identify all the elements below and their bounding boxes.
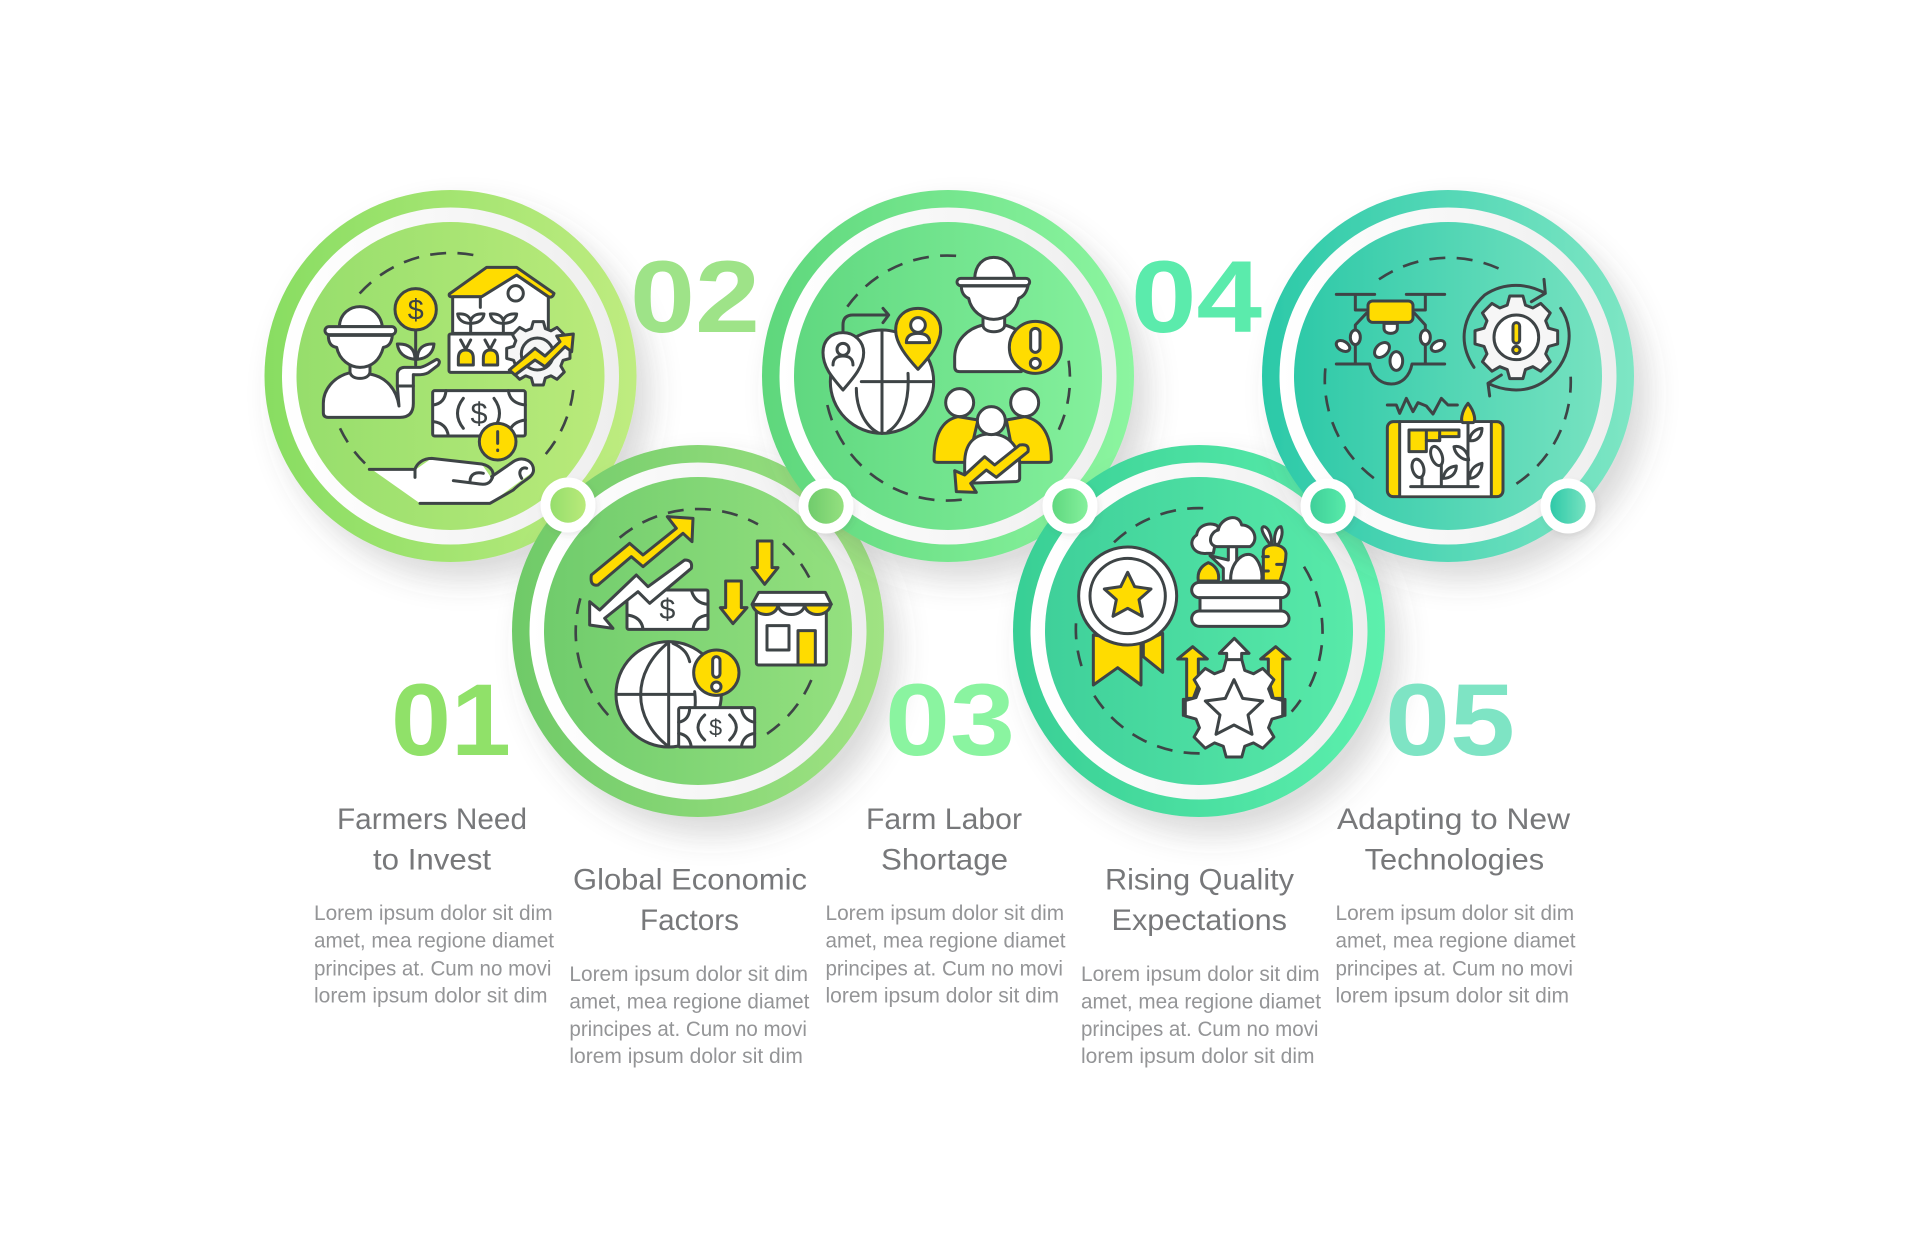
heading: Adapting to New <box>1337 803 1570 836</box>
text block: global economic factors <box>569 863 810 1068</box>
connector dot 1 <box>540 478 596 532</box>
icon: arrows, money, store and globe <box>576 509 831 747</box>
heading: Global Economic <box>573 863 807 896</box>
body text: principes at. Cum no movi <box>1081 1018 1318 1041</box>
body text: Lorem ipsum dolor sit dim <box>1081 963 1320 986</box>
panel: circle 1 farmers need to invest <box>264 190 636 562</box>
text block: farm labor shortage <box>826 803 1066 1008</box>
body text: lorem ipsum dolor sit dim <box>1336 985 1569 1008</box>
body text: amet, mea regione diamet <box>826 930 1066 953</box>
body text: principes at. Cum no movi <box>314 958 552 981</box>
heading: Technologies <box>1365 844 1544 876</box>
body text <box>1081 963 1321 1068</box>
body text <box>314 902 554 1008</box>
heading <box>1105 863 1294 937</box>
heading <box>337 803 527 876</box>
body text: principes at. Cum no movi <box>826 958 1063 981</box>
body text: amet, mea regione diamet <box>569 990 810 1014</box>
text block: rising quality expectations <box>1081 863 1321 1068</box>
body text: amet, mea regione diamet <box>1336 930 1576 953</box>
body text <box>1336 902 1576 1008</box>
body text: Lorem ipsum dolor sit dim <box>826 902 1064 925</box>
connector dot 3 <box>1042 478 1098 534</box>
panel: circle 3 farm labor shortage <box>762 190 1134 562</box>
connector dot 5 <box>1540 478 1596 534</box>
icon: farmer, plant, greenhouse, money and hand <box>323 253 573 503</box>
body text: lorem ipsum dolor sit dim <box>1081 1045 1314 1068</box>
number 05: 05 <box>1385 663 1515 777</box>
connector dot 4 <box>1300 478 1356 534</box>
panel: circle 2 global economic factors <box>512 445 884 817</box>
body text <box>569 963 810 1068</box>
body text: lorem ipsum dolor sit dim <box>569 1045 803 1068</box>
heading: Farm Labor <box>866 803 1022 836</box>
heading <box>1337 803 1570 876</box>
body text: Lorem ipsum dolor sit dim <box>569 963 808 986</box>
heading: Shortage <box>881 844 1008 876</box>
body text: Lorem ipsum dolor sit dim <box>314 902 553 925</box>
panel: circle 5 adapting to new technologies <box>1262 190 1634 562</box>
icon: arrows, money, store and globe: $ <box>659 594 675 626</box>
text block: adapting to new technologies <box>1336 803 1576 1008</box>
number 03: 03 <box>885 663 1015 777</box>
connector dot 2 <box>798 478 854 534</box>
heading: Rising Quality <box>1105 863 1294 896</box>
heading: Factors <box>640 904 739 937</box>
heading: Farmers Need <box>337 803 527 836</box>
icon: globe pins, worker and team <box>823 256 1070 501</box>
icon: farmer, plant, greenhouse, money and hand: $ <box>408 294 424 326</box>
number 04: 04 <box>1131 240 1262 354</box>
body text: Lorem ipsum dolor sit dim <box>1336 902 1574 925</box>
body text: lorem ipsum dolor sit dim <box>826 985 1059 1008</box>
number 02: 02 <box>630 240 760 354</box>
body text <box>826 902 1066 1008</box>
text block: farmers need to invest <box>314 803 554 1008</box>
heading: Expectations <box>1112 904 1287 937</box>
body text: amet, mea regione diamet <box>314 930 554 953</box>
body text: principes at. Cum no movi <box>1336 958 1573 981</box>
icon: drone, gear cycle and tablet with plants <box>1325 258 1571 497</box>
body text: lorem ipsum dolor sit dim <box>314 985 548 1008</box>
heading <box>866 803 1022 876</box>
icon: arrows, money, store and globe: $ <box>709 715 722 741</box>
body text: amet, mea regione diamet <box>1081 990 1321 1014</box>
heading: to Invest <box>373 844 492 876</box>
panel: circle 4 rising quality expectations <box>1013 445 1385 817</box>
body text: principes at. Cum no movi <box>569 1018 807 1041</box>
number 01: 01 <box>391 663 511 777</box>
heading <box>573 863 807 937</box>
icon: farmer, plant, greenhouse, money and hand: $ <box>470 397 488 431</box>
icon: medal, food basket and star gear <box>1076 508 1323 757</box>
